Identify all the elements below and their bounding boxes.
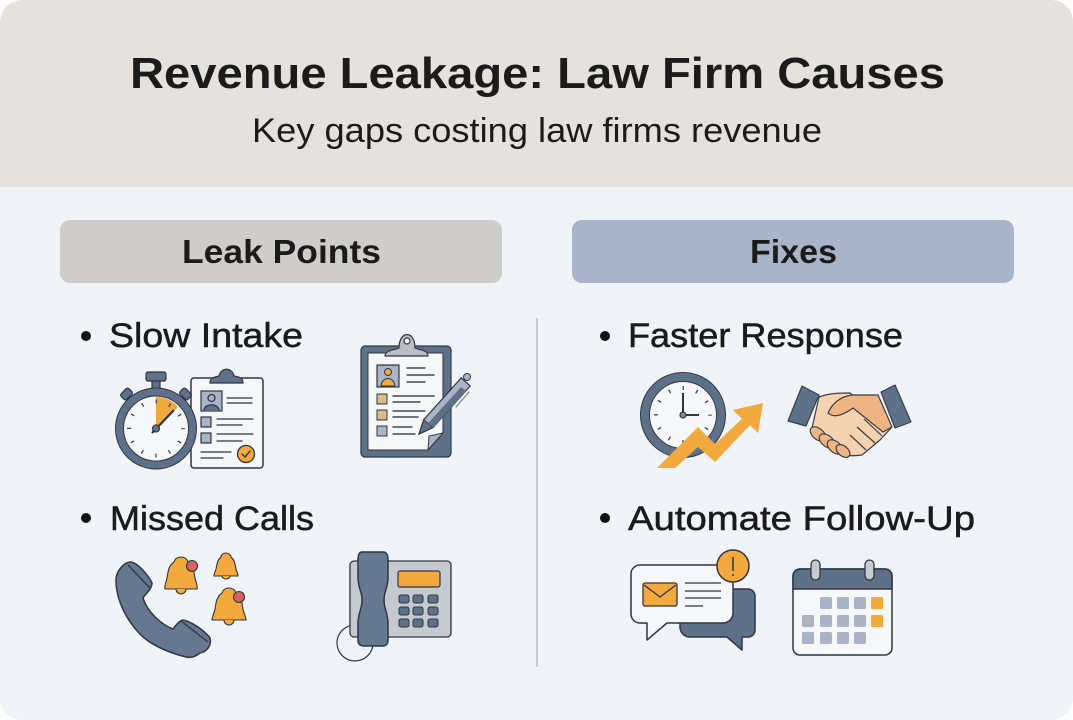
icon: alert bells xyxy=(165,553,246,625)
icon: desk telephone xyxy=(337,552,451,661)
icon: message bubbles xyxy=(631,550,755,650)
panel: leak points header xyxy=(60,220,502,283)
panel: fixes header: Fixes xyxy=(750,233,837,270)
bullet: slow intake: Slow Intake xyxy=(109,317,303,355)
panel: fixes header xyxy=(572,220,1014,283)
icon: stopwatch xyxy=(116,372,196,469)
title: Revenue Leakage: Law Firm Causes xyxy=(130,49,945,98)
icon: phone handset xyxy=(116,562,210,657)
subtitle: Key gaps costing law firms revenue xyxy=(252,112,822,150)
panel: leak points header: Leak Points xyxy=(182,233,381,270)
icon: clipboard with pen xyxy=(361,334,470,457)
icon: clock with rising arrow xyxy=(640,372,763,468)
icon: intake form xyxy=(191,369,263,468)
bullet: faster response: Faster Response xyxy=(628,317,903,355)
bullet: missed calls: Missed Calls xyxy=(110,500,314,538)
panel: header band xyxy=(0,0,1073,187)
icon: calendar xyxy=(793,560,892,655)
bullet: automate follow-up: Automate Follow-Up xyxy=(628,500,975,538)
icon: handshake xyxy=(788,385,911,460)
